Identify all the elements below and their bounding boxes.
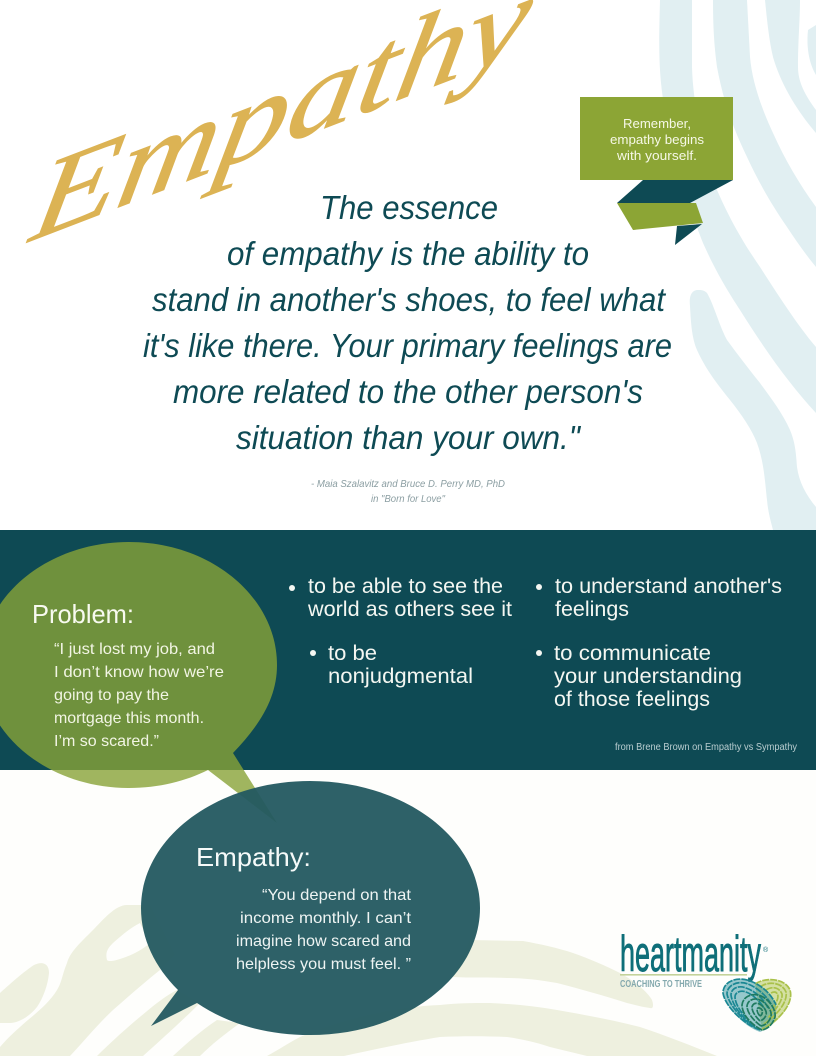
source credit: from Brene Brown on Empathy vs Sympathy [615, 742, 797, 753]
empathy traits list [289, 575, 782, 711]
quote text: stand in another's shoes, to feel what [152, 281, 667, 318]
empathy quote: income monthly. I can’t [240, 910, 412, 927]
problem quote: I don’t know how we’re [54, 664, 224, 681]
empathy quote: helpless you must feel. ” [236, 956, 411, 973]
quote text: more related to the other person's [173, 373, 643, 410]
logo: heartmanity: ® [763, 946, 769, 954]
ribbon callout [580, 97, 733, 245]
empathy traits list: nonjudgmental [328, 665, 473, 688]
problem quote: “I just lost my job, and [54, 641, 215, 658]
quote text: situation than your own." [236, 419, 581, 456]
background: blue fingerprint ridges [659, 0, 816, 530]
ribbon text [610, 116, 705, 163]
problem quote: mortgage this month. [54, 710, 204, 727]
empathy traits list: to be able to see the [308, 575, 503, 598]
quote attribution [311, 478, 505, 505]
empathy traits list: your understanding [554, 665, 742, 688]
logo: heartmanity [620, 926, 791, 1032]
empathy traits list: to communicate [554, 642, 711, 665]
dark teal band [0, 530, 816, 770]
quote text: of empathy is the ability to [227, 235, 589, 272]
empathy traits list: to be [328, 642, 377, 665]
empathy traits list: of those feelings [554, 688, 710, 711]
empathy quote: imagine how scared and [236, 933, 411, 950]
ribbon text: Remember, [623, 116, 691, 131]
empathy heading: Empathy: [196, 842, 311, 872]
quote attribution: - Maia Szalavitz and Bruce D. Perry MD, PhD [311, 478, 505, 490]
empathy traits list: to understand another's [555, 575, 782, 598]
title: Empathy: Empathy [21, 0, 543, 268]
problem quote [54, 641, 224, 750]
quote text [143, 189, 672, 456]
speech bubble: problem [0, 542, 277, 823]
quote text: it's like there. Your primary feelings are [143, 327, 672, 364]
empathy quote [236, 887, 412, 973]
ribbon text: empathy begins [610, 132, 705, 147]
problem heading: Problem: [32, 599, 134, 629]
problem quote: going to pay the [54, 687, 169, 704]
quote text: The essence [320, 189, 498, 226]
speech bubble: empathy [141, 781, 480, 1035]
empathy quote: “You depend on that [262, 887, 412, 904]
logo tagline: COACHING TO THRIVE [620, 979, 702, 990]
empathy traits list: feelings [555, 598, 629, 621]
problem quote: I’m so scared.” [54, 733, 159, 750]
ribbon text: with yourself. [616, 148, 697, 163]
empathy traits list: world as others see it [307, 598, 512, 621]
background: beige fingerprint ridges [0, 905, 717, 1056]
icon: fingerprint heart [723, 979, 791, 1032]
quote attribution: in "Born for Love" [371, 493, 446, 505]
